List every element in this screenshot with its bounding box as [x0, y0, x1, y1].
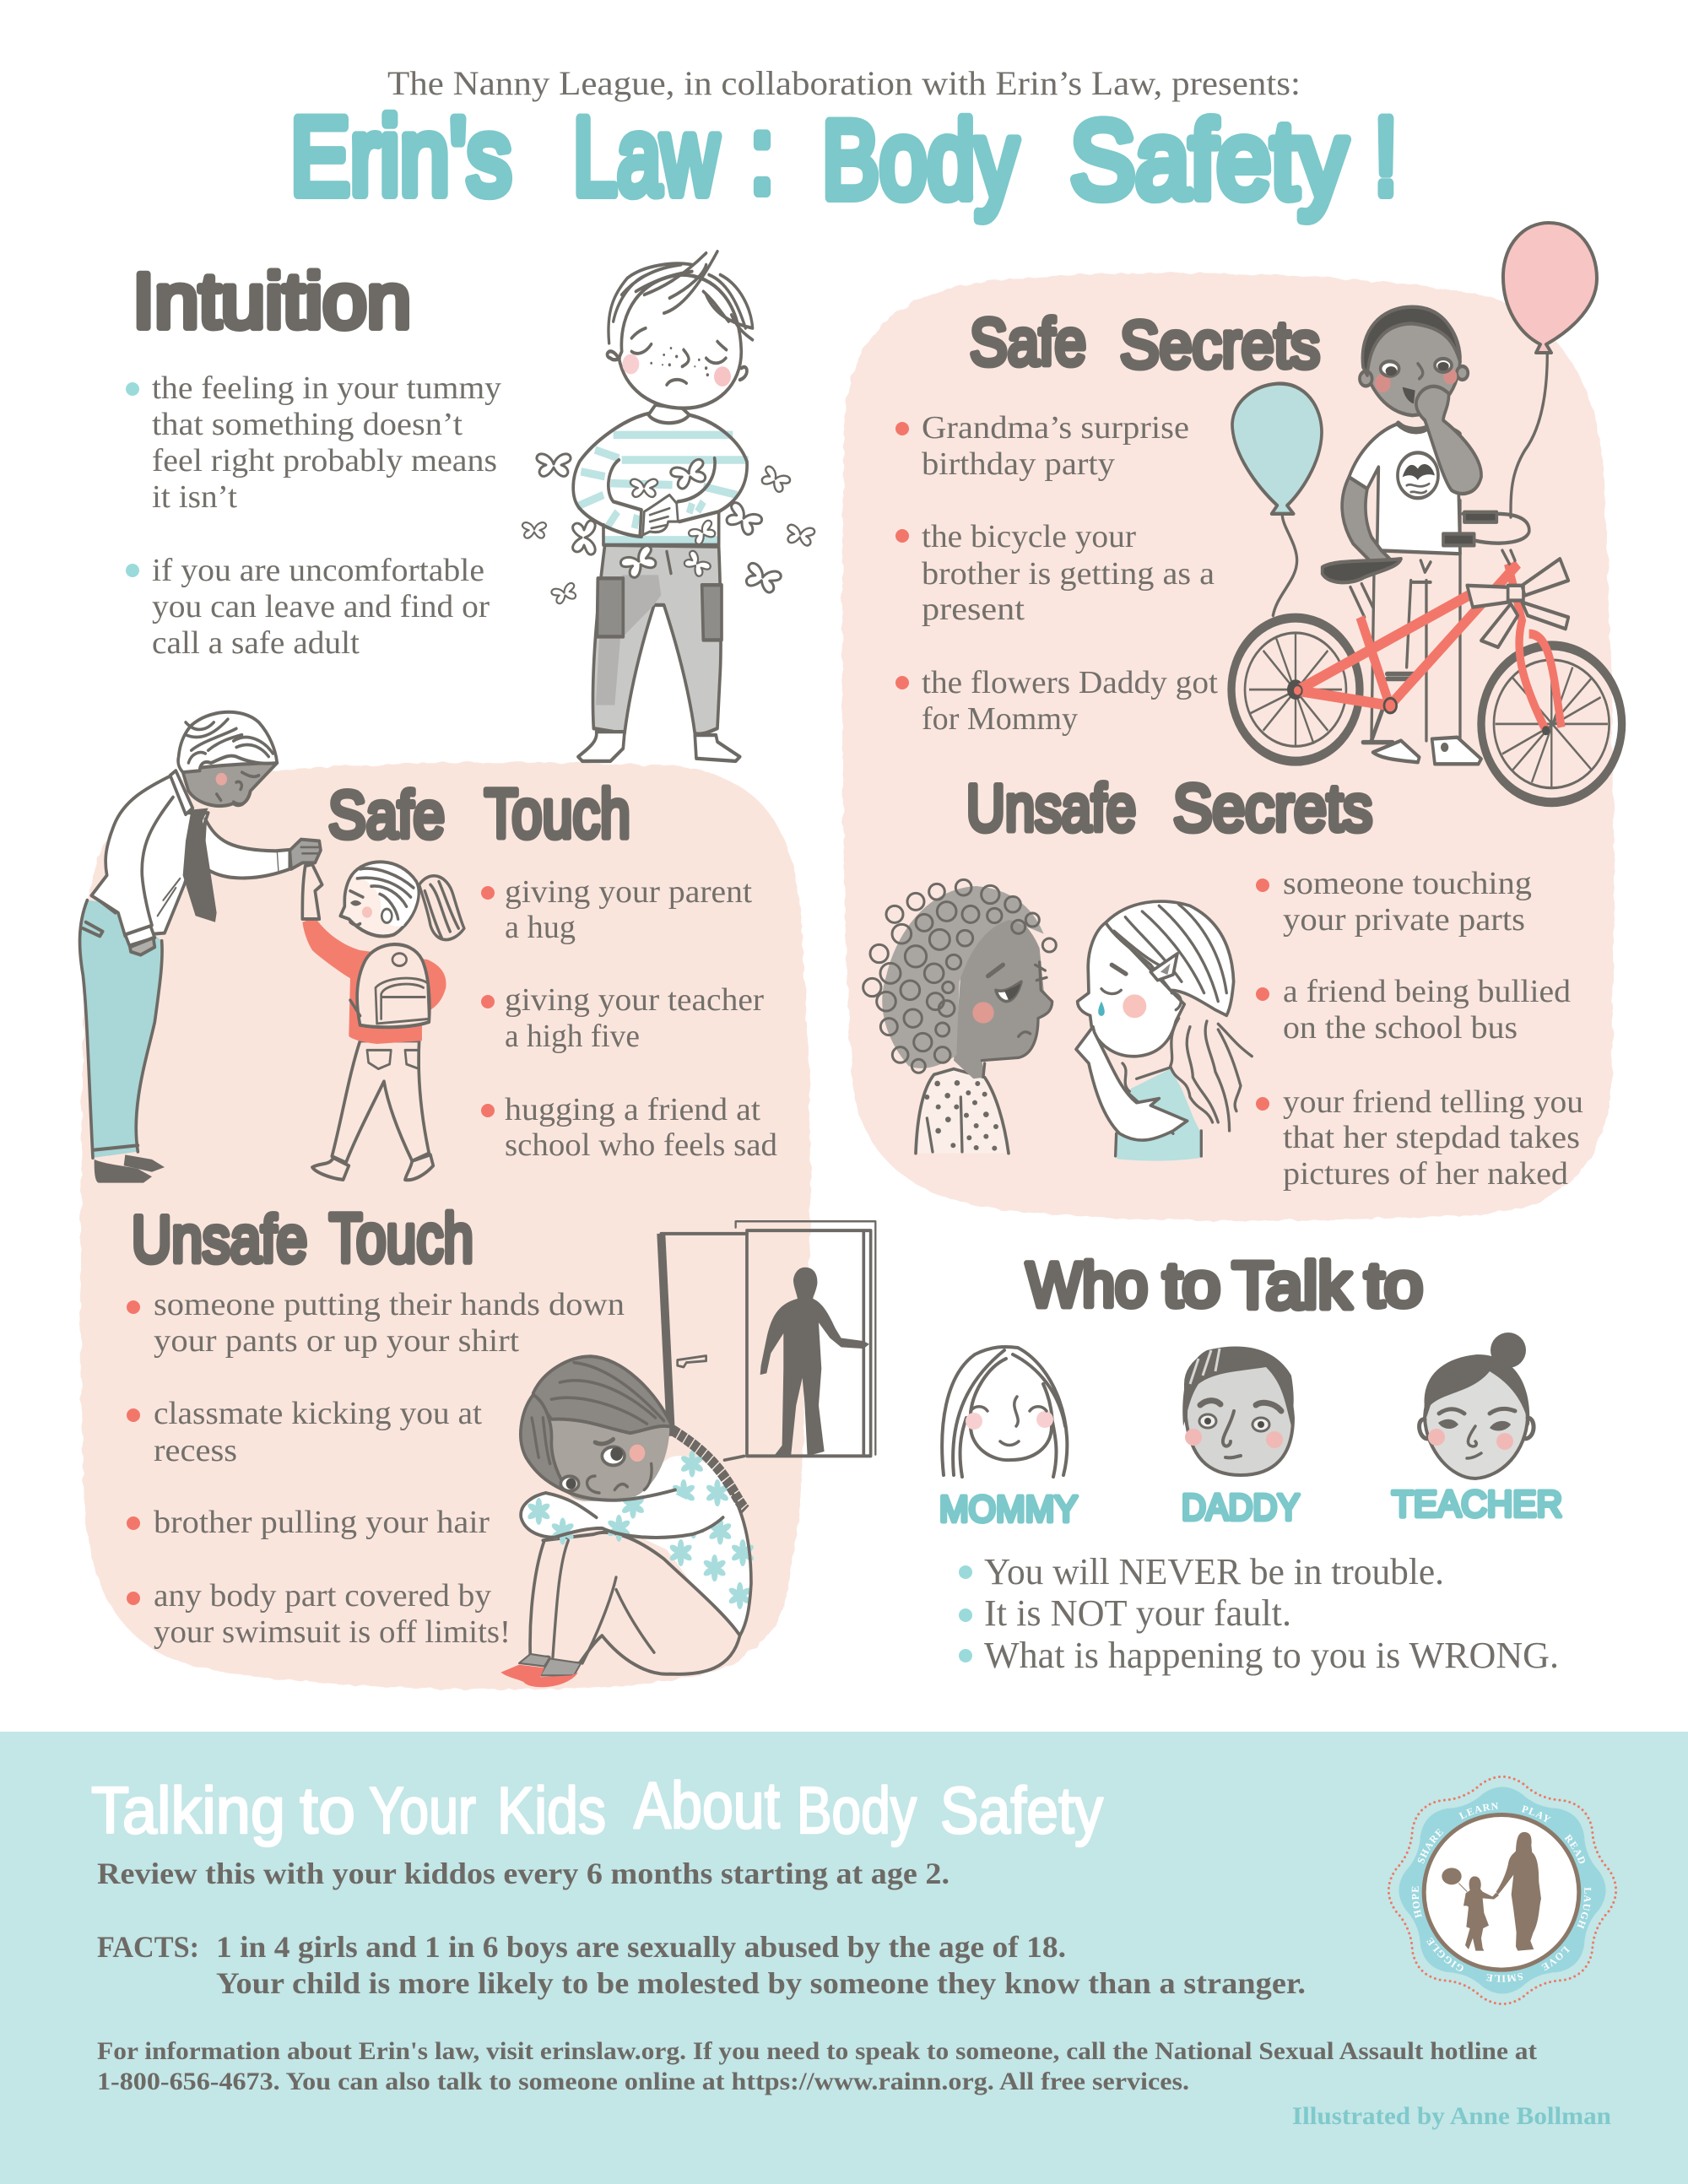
heading: unsafe secrets: Unsafe [966, 770, 1136, 845]
title [290, 93, 1398, 221]
presenter line: The Nanny League, in collaboration with Erin’s Law, presents: [387, 64, 1301, 102]
bullet list: safe touch: a high five [505, 1019, 640, 1054]
illustrator credit: Illustrated by Anne Bollman [1292, 2102, 1611, 2130]
bullet list: safe touch: hugging a friend at [505, 1092, 760, 1127]
bullet list: intuition: it isn’t [152, 479, 237, 515]
bullet list: intuition: if you are uncomfortable [152, 553, 484, 588]
logo: nanny league badge: SMILE [1486, 1973, 1523, 1982]
heading: safe secrets: Secrets [1120, 307, 1320, 381]
heading: safe touch [328, 776, 630, 852]
logo: nanny league badge: READ [1565, 1834, 1585, 1863]
panel: safe and unsafe touch background [80, 762, 811, 1689]
bullet list: unsafe touch [127, 1287, 625, 1650]
bullet list: unsafe secrets: someone touching [1283, 866, 1532, 901]
title: : [749, 93, 775, 216]
bullet list: unsafe touch: someone putting their hands down [154, 1287, 625, 1322]
bullet list: unsafe secrets: that her stepdad takes [1283, 1120, 1580, 1155]
resources information: For information about Erin's law, visit erinslaw.org. If you need to speak to someone, call the National Sexual Assault hotline at [97, 2037, 1537, 2065]
footer band [0, 1732, 1688, 2184]
label: mommy: MOMMY [939, 1489, 1078, 1530]
bullet list: safe secrets: present [922, 592, 1025, 627]
footer heading [91, 1768, 1103, 1847]
bullet list: intuition: you can leave and find or [152, 589, 490, 624]
bullet list: unsafe touch: any body part covered by [154, 1578, 491, 1614]
bullet list: safe touch [481, 874, 777, 1163]
heading: safe touch: Touch [484, 776, 630, 852]
heading: unsafe secrets [966, 770, 1372, 845]
footer heading: Talking [91, 1773, 285, 1847]
reassurance bullet list [959, 1551, 1559, 1676]
footer heading: Safety [940, 1773, 1103, 1847]
portrait: mommy [942, 1347, 1067, 1477]
header [290, 64, 1398, 221]
reassurance bullet list: What is happening to you is WRONG. [984, 1635, 1559, 1676]
section: who to talk to [939, 1248, 1562, 1676]
review note: Review this with your kiddos every 6 months starting at age 2. [97, 1857, 950, 1890]
illustration: sad girl hugging knees [500, 1356, 755, 1687]
illustration: curly haired girl [863, 879, 1056, 1154]
bullet list: safe secrets [895, 410, 1218, 737]
bullet list: safe secrets: the bicycle your [922, 519, 1136, 554]
portrait: daddy [1182, 1346, 1294, 1475]
bullet list: intuition: feel right probably means [152, 443, 497, 478]
illustration: boy with butterflies in tummy [573, 251, 753, 761]
footer heading: Kids [497, 1773, 606, 1847]
panel: secrets background [842, 273, 1614, 1221]
heading: who to talk to: Who [1026, 1250, 1148, 1320]
facts [97, 1930, 1306, 2000]
section: safe secrets [895, 223, 1622, 803]
bullet list: safe touch: giving your teacher [505, 982, 764, 1018]
bullet list: unsafe touch: your pants or up your shirt [154, 1323, 519, 1359]
bullet list: safe secrets: the flowers Daddy got [922, 665, 1218, 700]
illustration: crying girl telling a secret [1076, 901, 1252, 1161]
logo: nanny league badge: GIGGLE [1426, 1938, 1463, 1971]
heading: safe secrets [970, 305, 1320, 381]
bullet list: safe touch: a hug [505, 910, 576, 945]
bullet list: intuition: the feeling in your tummy [152, 370, 501, 406]
logo: nanny league badge [1388, 1776, 1617, 2005]
title: Body [822, 98, 1018, 221]
heading: who to talk to: Talk [1232, 1248, 1352, 1322]
illustration: door with silhouette [657, 1221, 875, 1460]
illustration: pink balloon [1503, 223, 1597, 353]
bullet list: safe secrets: Grandma’s surprise [922, 410, 1189, 446]
section: unsafe touch [127, 1200, 875, 1687]
bullet list: unsafe secrets: your friend telling you [1283, 1084, 1583, 1120]
bullet list: safe touch: giving your parent [505, 874, 752, 910]
facts: FACTS: [97, 1930, 199, 1964]
bullet list: unsafe secrets: your private parts [1283, 902, 1525, 938]
heading: who to talk to [1026, 1248, 1423, 1322]
bicycle wheels and frame [1231, 618, 1360, 761]
logo: nanny league badge: SHARE [1418, 1828, 1443, 1863]
bullet list: intuition: call a safe adult [152, 625, 360, 661]
bullet list: safe touch: school who feels sad [505, 1127, 777, 1163]
bullet list: intuition [126, 370, 501, 661]
bullet list: unsafe secrets: a friend being bullied [1283, 974, 1571, 1009]
bullet list: safe secrets: birthday party [922, 446, 1115, 482]
footer heading: to [300, 1773, 355, 1847]
heading: safe touch: Safe [328, 777, 445, 851]
label: daddy: DADDY [1182, 1487, 1300, 1528]
logo: nanny league badge: LOVE [1541, 1946, 1570, 1971]
bullet list: unsafe secrets: pictures of her naked [1283, 1156, 1568, 1192]
footer heading: Body [797, 1773, 917, 1847]
logo: nanny league badge: LAUGH [1577, 1887, 1592, 1929]
heading: unsafe touch [132, 1200, 473, 1277]
bullet list: unsafe touch: your swimsuit is off limits! [154, 1614, 511, 1650]
title: Law [573, 95, 719, 218]
heading: safe secrets: Safe [970, 305, 1086, 379]
heading: unsafe secrets: Secrets [1173, 770, 1372, 845]
section: intuition [126, 251, 815, 761]
heading: who to talk to: to [1365, 1250, 1423, 1320]
section: safe touch [80, 712, 777, 1183]
title: Safety [1070, 98, 1347, 221]
logo: nanny league badge: LEARN [1458, 1803, 1498, 1819]
facts: 1 in 4 girls and 1 in 6 boys are sexually abused by the age of 18. [216, 1930, 1066, 1964]
logo: nanny league badge: HOPE [1411, 1886, 1422, 1919]
heading: who to talk to: to [1163, 1250, 1220, 1320]
silhouette figure [760, 1268, 869, 1456]
heading: intuition: Intuition [133, 258, 411, 344]
heading: unsafe touch: Unsafe [132, 1202, 307, 1276]
bullet list: safe secrets: brother is getting as a [922, 556, 1215, 592]
illustration: man giving high five [80, 712, 321, 1183]
bullet list: unsafe secrets: on the school bus [1283, 1010, 1518, 1046]
bullet list: unsafe secrets [1256, 866, 1583, 1192]
bullet list: unsafe touch: classmate kicking you at [154, 1396, 482, 1431]
illustration: boy with bicycle and balloons [1231, 307, 1622, 803]
facts: Your child is more likely to be molested by someone they know than a stranger. [216, 1966, 1306, 2000]
illustration: girl with backpack giving high five [302, 862, 464, 1180]
section: unsafe secrets [863, 770, 1583, 1192]
resources information [97, 2037, 1537, 2095]
bullet list: unsafe touch: brother pulling your hair [154, 1505, 490, 1540]
footer heading: About [634, 1768, 780, 1842]
bullet list: intuition: that something doesn’t [152, 407, 463, 442]
reassurance bullet list: You will NEVER be in trouble. [984, 1551, 1444, 1592]
resources information: 1-800-656-4673. You can also talk to someone online at https://www.rainn.org. All free services. [97, 2068, 1189, 2095]
portrait: teacher [1420, 1333, 1534, 1479]
label: teacher: TEACHER [1392, 1484, 1562, 1525]
reassurance bullet list: It is NOT your fault. [984, 1592, 1291, 1634]
title: ! [1374, 95, 1398, 218]
bullet list: unsafe touch: recess [154, 1433, 237, 1468]
heading: unsafe touch: Touch [329, 1200, 473, 1277]
bullet list: safe secrets: for Mommy [922, 701, 1078, 737]
title: Erin's [290, 95, 511, 218]
logo: nanny league badge: PLAY [1521, 1805, 1551, 1823]
butterflies around the boy [522, 454, 815, 605]
footer heading: Your [369, 1773, 476, 1847]
